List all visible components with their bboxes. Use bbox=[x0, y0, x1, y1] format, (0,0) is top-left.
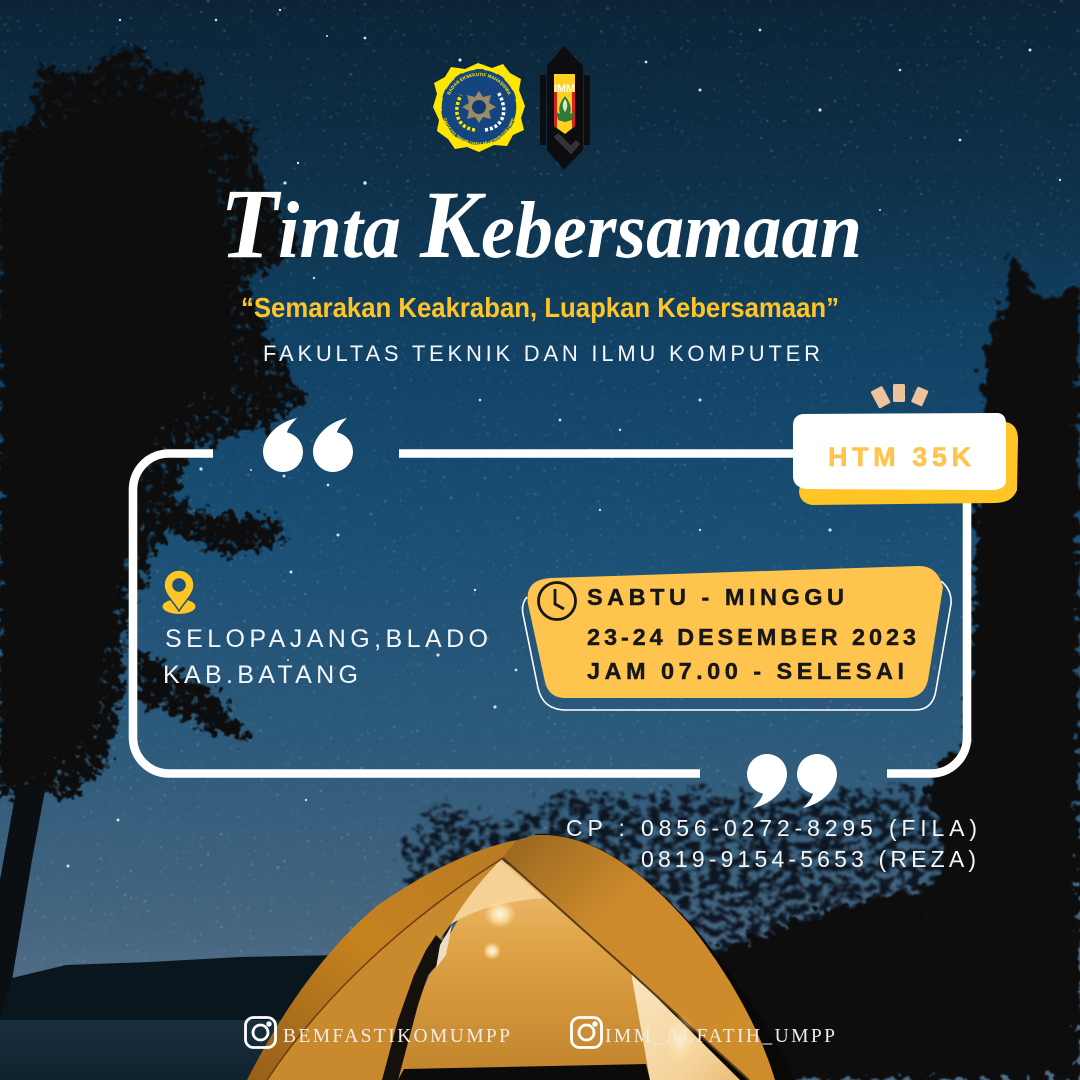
logo: BEM emblem bbox=[433, 63, 525, 152]
icon: location pin bbox=[162, 570, 196, 614]
logo: BEM emblem: FAKULTAS TEKNIK DAN ILMU KOMPUTER UMPP bbox=[444, 118, 514, 145]
schedule text: SABTU - MINGGU bbox=[587, 584, 844, 610]
scene: right tree bbox=[925, 255, 1080, 1080]
text: contact persons: 0819-9154-5653 (REZA) bbox=[641, 846, 976, 872]
social: BEM instagram: BEMFASTIKOMUMPP bbox=[283, 1026, 510, 1047]
title: Tinta Kebersamaan bbox=[220, 168, 862, 279]
icon: instagram bbox=[572, 1018, 602, 1048]
panel: schedule bbox=[522, 566, 951, 710]
text: location bbox=[163, 625, 488, 689]
text: contact persons bbox=[566, 815, 977, 872]
icon: instagram bbox=[246, 1018, 276, 1048]
scene: bottom treeline bbox=[405, 790, 1080, 1080]
text: contact persons: CP : 0856-0272-8295 (FILA) bbox=[566, 815, 977, 841]
scene: distant hill and water bbox=[0, 955, 340, 1080]
scene: left tree trunk bbox=[0, 785, 46, 1020]
subtitle: tagline: “Semarakan Keakraban, Luapkan Kebersamaan” bbox=[241, 292, 839, 323]
icon: closing quotation mark bbox=[747, 754, 837, 808]
badge: ticket price: HTM 35K bbox=[828, 442, 972, 472]
schedule text bbox=[587, 584, 916, 684]
badge: ticket price bbox=[793, 384, 1018, 505]
logo: IMM emblem: IMM bbox=[554, 83, 575, 95]
schedule text: 23-24 DESEMBER 2023 bbox=[587, 624, 916, 650]
subtitle: faculty: FAKULTAS TEKNIK DAN ILMU KOMPUTER bbox=[263, 341, 820, 366]
scene: left tree bbox=[0, 42, 305, 800]
schedule text: JAM 07.00 - SELESAI bbox=[587, 658, 904, 684]
badge accent dashes bbox=[870, 384, 929, 409]
panel: rounded frame bbox=[133, 454, 967, 774]
logo: BEM emblem: BADAN EKSEKUTIF MAHASISWA bbox=[446, 72, 511, 95]
scene: tent bbox=[247, 834, 795, 1080]
text: location: KAB.BATANG bbox=[163, 661, 358, 689]
social: IMM instagram bbox=[572, 1018, 835, 1048]
text: location: SELOPAJANG,BLADO bbox=[165, 625, 488, 653]
logo: IMM emblem bbox=[540, 46, 590, 170]
icon: opening quotation mark bbox=[263, 418, 353, 472]
icon: clock bbox=[538, 582, 576, 620]
social: BEM instagram bbox=[246, 1018, 510, 1048]
social: IMM instagram: IMM_ALFATIH_UMPP bbox=[605, 1026, 835, 1047]
